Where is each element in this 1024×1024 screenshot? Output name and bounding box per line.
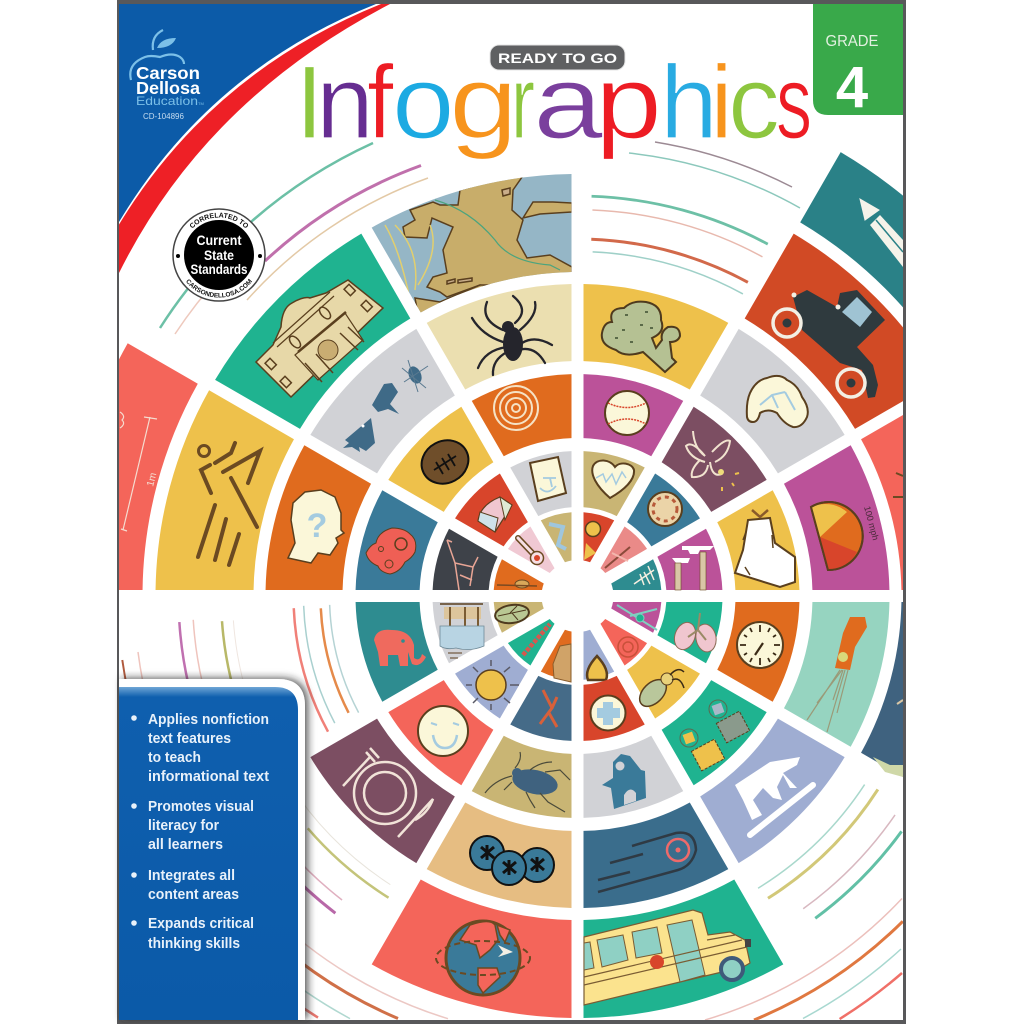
panel: feature list: Promotes visual (148, 799, 254, 815)
wedge: stick figure diagram (156, 390, 294, 590)
wedge: place setting (310, 719, 455, 863)
wedge: spider (427, 284, 572, 390)
wedge: speedometer: 100 mph (862, 505, 881, 541)
wedge: rope (508, 619, 555, 666)
wedge: one metre ruler: 1m (145, 472, 159, 488)
logo: Carson Dellosa Education (130, 30, 204, 121)
badge: ready to go (490, 45, 625, 70)
wedge: speedometer (784, 445, 889, 590)
wedge: garbage bag (717, 490, 799, 590)
wedge: book (510, 451, 572, 516)
wedge: historic building (215, 234, 410, 429)
tab: grade 4: GRADE (826, 33, 878, 50)
title: Infographics: c (728, 45, 780, 161)
wedge: clock (717, 602, 799, 702)
wedge: pie chart (455, 474, 528, 546)
panel: feature list: literacy for (148, 818, 219, 834)
wedge: schoolhouse (584, 736, 683, 818)
wedge: blue symbol (541, 512, 572, 562)
panel: feature list: all learners (148, 837, 223, 853)
wedge: brain coral (700, 329, 845, 473)
seal: correlated to current state standards: CORRELATED TO (190, 212, 248, 228)
wedge: coral right edge (861, 390, 999, 590)
title: Infographics: o (392, 45, 454, 161)
panel: feature list: Applies nonfiction (148, 712, 269, 728)
title: Infographics: i (710, 45, 733, 161)
tab: grade 4: 4 (836, 55, 868, 120)
logo: Carson Dellosa Education: CD-104896 (143, 112, 184, 121)
wedge: planet (494, 559, 544, 590)
wedge: one metre ruler (62, 343, 198, 590)
wedge: squid (784, 602, 889, 747)
wedge: monument (800, 152, 1021, 373)
wedge: flame (584, 630, 614, 680)
wedge: thermometer (508, 526, 555, 573)
title: Infographics: a (533, 45, 603, 161)
panel: feature list: thinking skills (148, 936, 240, 952)
wedge: broccoli (584, 284, 728, 390)
seal: correlated to current state standards (172, 208, 266, 302)
wedge: sun (455, 646, 528, 718)
wedge: shell rings (600, 619, 647, 666)
wedge: school bus (584, 880, 783, 1018)
wedge: firefly (662, 407, 767, 512)
title: Infographics: s (776, 45, 812, 161)
wedge: leaf (494, 602, 544, 633)
wedge: pizza (627, 474, 700, 546)
title: Infographics: h (660, 45, 718, 161)
wedge: fingerprint (472, 374, 572, 456)
tab: grade 4 (813, 4, 903, 120)
wedge: fish, plant and fly (310, 329, 455, 473)
panel: feature list: Integrates all (148, 868, 235, 884)
wedge: white branching crystal (611, 559, 661, 590)
panel: feature list (119, 679, 305, 1020)
page: book cover (117, 0, 906, 1024)
panel: feature list: text features (148, 731, 231, 747)
badge: ready to go: READY TO GO (498, 50, 617, 66)
title: Infographics: g (449, 45, 518, 161)
logo: Carson Dellosa Education: Education (136, 94, 198, 108)
wedge: head with question mark: ? (307, 507, 327, 545)
wedge: tree stump (541, 630, 572, 682)
wedge: branch (510, 676, 572, 741)
wedge: globe (372, 880, 572, 1018)
seal: correlated to current state standards: State (204, 247, 234, 263)
wedge: smiling face (388, 680, 493, 785)
wedge: elephant (356, 602, 438, 702)
seal: correlated to current state standards: Standards (190, 261, 248, 277)
seal: correlated to current state standards: CARSONDELLOSA.COM (186, 278, 252, 298)
logo: Carson Dellosa Education: Carson (136, 63, 200, 83)
title: Infographics: r (511, 45, 535, 161)
title: Infographics: I (295, 45, 324, 161)
panel: feature list: to teach (148, 750, 201, 766)
wedge: head with question mark (266, 445, 371, 590)
wedge: dark blue with partial icon (861, 602, 999, 802)
seal: correlated to current state standards: Current (196, 232, 242, 248)
wedge: asteroid (356, 490, 438, 590)
wedge: lungs (657, 602, 722, 663)
wedge: cockroach (472, 736, 572, 818)
chart: radial wheel of icon wedges (62, 152, 1021, 1018)
panel: feature list: Expands critical (148, 916, 254, 932)
wedge: polar bear (700, 719, 845, 863)
logo: Carson Dellosa Education: TM (198, 101, 204, 106)
wedge: map of coastline (372, 170, 572, 325)
title: Infographics: p (595, 45, 662, 161)
wedge: microchips (662, 680, 767, 785)
wedge: eye shapes (584, 512, 614, 562)
title: Infographics: n (316, 45, 374, 161)
wedge: football (388, 407, 493, 512)
wedge: crossing teal lines (611, 602, 661, 633)
panel: feature list: content areas (148, 887, 239, 903)
wedge: pink tissue (600, 526, 647, 573)
wedge: blueberries (427, 802, 572, 908)
wedge: heart with pulse (584, 451, 645, 516)
panel: feature list: informational text (148, 769, 269, 785)
title: Infographics: f (367, 45, 395, 161)
corner: blue and red swoosh (119, 4, 390, 273)
wedge: medical cross (584, 676, 645, 741)
logo: Carson Dellosa Education: Dellosa (136, 78, 200, 98)
wedge: cliff dwelling columns (657, 529, 722, 590)
wedge: baseball (584, 374, 683, 456)
wedge: constellation (433, 529, 498, 590)
wedge: beetle (627, 646, 700, 718)
wedge: antique car (745, 234, 940, 429)
wedge: comet (584, 802, 728, 908)
wedge: curtain dam (433, 602, 498, 663)
